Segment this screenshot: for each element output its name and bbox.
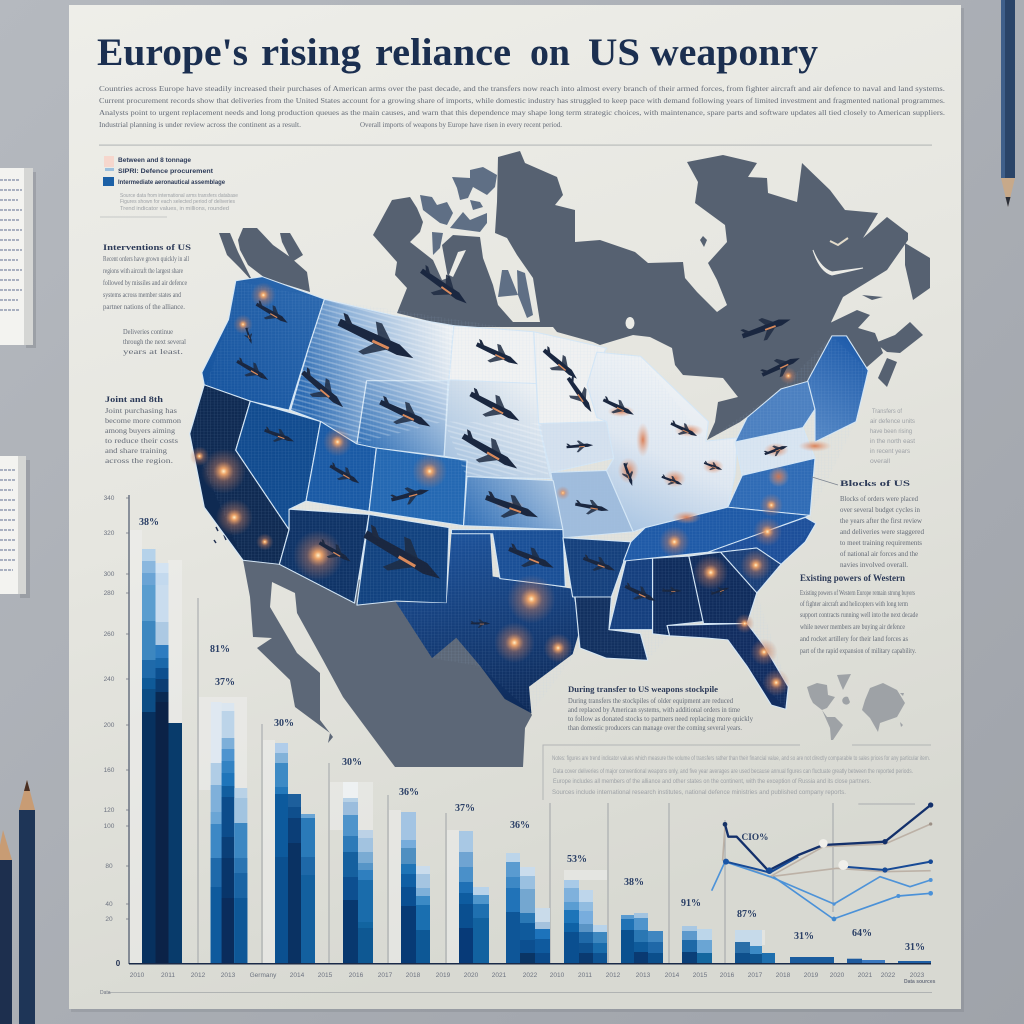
line chart reference line bbox=[858, 803, 915, 805]
pencil, bottom left bbox=[19, 780, 35, 1024]
x axis labels: 2012 bbox=[606, 972, 621, 979]
value labels: 31% bbox=[905, 942, 925, 953]
Kansas bbox=[464, 477, 563, 530]
bar group 4 bbox=[343, 782, 373, 964]
x axis labels: Germany bbox=[250, 972, 277, 979]
text block: interventions: Interventions of US bbox=[103, 243, 192, 252]
text block: existing powers: of fighter aircraft and helicopters with long term bbox=[800, 599, 908, 608]
y axis labels: 0 bbox=[116, 959, 121, 968]
Iowa bbox=[539, 422, 614, 473]
text block: right upper note: air defence units bbox=[870, 419, 915, 425]
Colorado bbox=[369, 448, 467, 526]
value labels: 36% bbox=[399, 787, 419, 798]
x axis labels: 2016 bbox=[720, 972, 735, 979]
value labels: 87% bbox=[737, 909, 757, 920]
bar group 14 bbox=[898, 961, 931, 964]
Oklahoma bbox=[451, 530, 565, 587]
Tennessee and Kentucky bbox=[624, 507, 810, 561]
map grid texture bbox=[190, 281, 868, 713]
notes box: Data cover deliveries of major conventional weapons only, and five year averages are used because annual figures can fluctuate greatly between the reported periods. bbox=[553, 769, 913, 775]
bar group 6 bbox=[459, 831, 489, 964]
value labels: 36% bbox=[510, 820, 530, 831]
Great Lakes states bbox=[587, 352, 737, 532]
Washington and Oregon bbox=[202, 277, 324, 410]
bar group 3 bbox=[275, 743, 315, 964]
tan series bbox=[723, 824, 931, 877]
bar group 7 bbox=[506, 853, 550, 964]
x axis labels: 2014 bbox=[290, 972, 305, 979]
New England bbox=[808, 336, 868, 442]
x axis labels: 2020 bbox=[464, 972, 479, 979]
text block: existing powers: and rocket artillery for their land forces as bbox=[800, 634, 908, 643]
text block: existing powers: Existing powers of Western Europe remain strong buyers bbox=[800, 588, 915, 597]
legend note: Figures shown for each selected period of deliveries bbox=[120, 199, 235, 205]
text block: interventions: through the next several bbox=[123, 337, 186, 346]
x axis labels: 2012 bbox=[191, 972, 206, 979]
text block: interventions bbox=[103, 243, 192, 356]
Newfoundland bbox=[905, 243, 930, 300]
x axis labels: 2020 bbox=[830, 972, 845, 979]
text block: existing powers: Existing powers of Western bbox=[800, 573, 905, 583]
chart backing columns bbox=[130, 530, 765, 964]
text block: joint: and share training bbox=[105, 446, 167, 455]
bar group 2 bbox=[211, 702, 247, 964]
text block: during transfer: During transfers the stockpiles of older equipment are reduced bbox=[568, 696, 733, 705]
bar group 9 bbox=[621, 913, 663, 964]
South America bbox=[822, 710, 843, 740]
North Carolina bbox=[708, 517, 816, 564]
value labels: 38% bbox=[624, 877, 644, 888]
Nevada bbox=[236, 401, 321, 530]
footer rule bbox=[108, 992, 932, 993]
x axis labels: 2022 bbox=[523, 972, 538, 979]
North Dakota bbox=[449, 326, 536, 384]
y axis labels: 100 bbox=[104, 823, 115, 830]
text block: blocks of US: Blocks of orders were placed bbox=[840, 494, 918, 503]
bar group 5 bbox=[401, 812, 430, 964]
legend swatch: low share bbox=[104, 156, 114, 167]
x axis labels: 2018 bbox=[406, 972, 421, 979]
x axis labels: 2014 bbox=[665, 972, 680, 979]
text block: during transfer: and replaced by American systems, with additional orders in time bbox=[568, 705, 741, 714]
intro text block: Industrial planning is under review across the continent as a result. bbox=[99, 120, 301, 129]
footer source: Data bbox=[100, 990, 111, 996]
Mexico landmass bbox=[243, 550, 532, 767]
footer credit: Data sources bbox=[904, 979, 936, 985]
title: reliance bbox=[375, 31, 511, 74]
bar group 8 bbox=[564, 880, 607, 964]
notes box: Sources include international research institutes, national defence ministries and published company reports. bbox=[552, 790, 846, 796]
South Dakota and Nebraska bbox=[444, 380, 551, 479]
Pennsylvania and Ohio bbox=[735, 428, 815, 475]
text block: right upper note bbox=[870, 409, 915, 465]
y axis labels: 20 bbox=[105, 916, 113, 923]
bar group 1 bbox=[142, 549, 182, 964]
small Pacific islands bbox=[214, 527, 236, 543]
x axis labels: 2017 bbox=[748, 972, 763, 979]
text block: interventions: systems across member states and bbox=[103, 290, 181, 299]
y axis labels: 200 bbox=[104, 722, 115, 729]
Prince Edward and Cape Breton bbox=[878, 358, 897, 387]
Arctic islands bbox=[420, 167, 533, 318]
blue series bbox=[726, 857, 931, 873]
legend swatch: high share bbox=[103, 177, 114, 186]
y axis labels: 260 bbox=[104, 631, 115, 638]
intro text block: Analysts point to urgent replacement needs and long production queues as the main causes, and warn that this dependence may shape long term strategic choices, with maintenance, spare parts and software updates all tied closely to American suppliers. bbox=[99, 108, 945, 117]
notes box bbox=[543, 745, 931, 800]
notes box: Europe includes all members of the alliance and other states on the continent, with the exception of Russia and its close partners. bbox=[553, 779, 871, 785]
scaled map layers bbox=[190, 261, 868, 713]
Nova Scotia bbox=[875, 322, 923, 353]
small islands bbox=[842, 693, 904, 727]
city glow markers bbox=[190, 282, 797, 696]
South Carolina bbox=[720, 548, 781, 593]
Alaska west lobe bbox=[219, 233, 253, 282]
Canada lakes and inlets bbox=[449, 236, 863, 329]
map of North America bbox=[190, 151, 930, 767]
text block: joint: Joint and 8th bbox=[105, 395, 164, 404]
title: US bbox=[588, 31, 640, 74]
y axis labels: 240 bbox=[104, 676, 115, 683]
title: on bbox=[530, 31, 570, 74]
index card, lower left bbox=[0, 456, 30, 598]
x axis labels: 2015 bbox=[318, 972, 333, 979]
line chart bbox=[712, 802, 933, 921]
line chart label: CIO% bbox=[742, 833, 768, 843]
x axis labels: 2016 bbox=[349, 972, 364, 979]
text block: blocks of US bbox=[840, 479, 924, 569]
North America bbox=[807, 683, 835, 710]
x axis labels: 2019 bbox=[436, 972, 451, 979]
x axis baseline bbox=[129, 963, 931, 964]
y axis labels: 340 bbox=[104, 495, 115, 502]
value labels: 31% bbox=[794, 931, 814, 942]
index card, upper left bbox=[0, 168, 36, 348]
New Mexico bbox=[357, 515, 449, 605]
text block: during transfer: than domestic producers can manage over the coming several years. bbox=[568, 723, 742, 732]
value labels: 37% bbox=[455, 803, 475, 814]
title: rising bbox=[261, 31, 362, 74]
Wyoming bbox=[357, 381, 448, 456]
x axis labels: 2018 bbox=[776, 972, 791, 979]
x axis labels: 2011 bbox=[161, 972, 175, 979]
x axis labels: 2021 bbox=[492, 972, 507, 979]
y axis labels: 80 bbox=[105, 863, 113, 870]
New York bbox=[735, 381, 815, 442]
Texas bbox=[396, 534, 580, 713]
header rule bbox=[99, 144, 932, 146]
x axis labels: 2022 bbox=[881, 972, 896, 979]
intro text block: Countries across Europe have steadily increased their purchases of American arms over the past decade, and the transfers now reach into almost every branch of their armed forces, from fighter aircraft and air defence to naval and land systems. bbox=[99, 84, 945, 93]
value labels: 91% bbox=[681, 898, 701, 909]
bar group 11 bbox=[735, 930, 775, 964]
divider lines bbox=[198, 598, 833, 963]
text block: existing powers: while newer members are buying air defence bbox=[800, 622, 906, 631]
aircraft icons bbox=[233, 261, 804, 628]
y axis labels bbox=[104, 495, 121, 968]
text block: interventions: years at least. bbox=[123, 347, 183, 356]
Louisiana bbox=[575, 597, 648, 660]
United States states bbox=[190, 277, 868, 713]
text block: blocks of US: over several budget cycles in bbox=[840, 505, 920, 514]
text block: during transfer bbox=[568, 684, 753, 732]
x axis labels: 2011 bbox=[578, 972, 592, 979]
text block: right upper note: Transfers of bbox=[872, 409, 902, 415]
title: Europe's bbox=[97, 31, 248, 74]
bar chart bbox=[104, 495, 931, 979]
text block: existing powers: support contracts running well into the next decade bbox=[800, 610, 919, 619]
text block: blocks of US: navies involved overall. bbox=[840, 560, 908, 569]
x axis labels: 2023 bbox=[910, 972, 925, 979]
data points bbox=[723, 802, 933, 921]
y axis labels: 160 bbox=[104, 767, 115, 774]
Greenland bbox=[837, 674, 851, 690]
text block: joint: become more common bbox=[105, 416, 181, 425]
text block: during transfer: to follow as donated stocks to partners need replacing more quickly bbox=[568, 714, 753, 723]
y axis bbox=[126, 495, 129, 964]
text block: existing powers bbox=[800, 573, 919, 655]
legend labels: Between and 8 tonnage bbox=[118, 157, 191, 164]
Alaska east lobe bbox=[238, 228, 310, 292]
text block: interventions: partner nations of the alliance. bbox=[103, 302, 185, 311]
value labels bbox=[139, 517, 925, 953]
value labels: 81% bbox=[210, 644, 230, 655]
x axis labels: 2015 bbox=[693, 972, 708, 979]
Mississippi bbox=[609, 558, 653, 630]
text block: blocks of US: the years after the first review bbox=[840, 516, 923, 525]
Alabama bbox=[653, 556, 703, 636]
Eurasia and Africa bbox=[862, 683, 905, 732]
gulf island bbox=[862, 295, 883, 300]
text block: blocks of US: of national air forces and the bbox=[840, 549, 919, 558]
y axis labels: 320 bbox=[104, 530, 115, 537]
y axis labels: 120 bbox=[104, 807, 115, 814]
conflict blots, Great Lakes bbox=[495, 406, 831, 524]
value labels: 64% bbox=[852, 928, 872, 939]
text block: joint: to reduce their costs bbox=[105, 436, 178, 445]
Montana stripe texture bbox=[291, 299, 548, 477]
x axis labels: 2010 bbox=[130, 972, 145, 979]
mid blue series bbox=[773, 877, 931, 919]
text block: blocks of US: Blocks of US bbox=[840, 479, 911, 488]
text block: right upper note: in recent years bbox=[870, 449, 910, 455]
value labels: 53% bbox=[567, 854, 587, 865]
Canada and Alaska landmass bbox=[219, 151, 930, 440]
x axis labels: 2019 bbox=[804, 972, 819, 979]
bar group 10 bbox=[682, 926, 712, 964]
x axis labels: 2010 bbox=[550, 972, 565, 979]
legend note: Trend indicator values, in millions, rounded bbox=[120, 206, 229, 212]
legend note: Source data from international arms transfers database bbox=[120, 193, 238, 199]
Arizona bbox=[279, 509, 369, 603]
legend labels: SIPRI: Defence procurement bbox=[118, 168, 214, 175]
intro text block: Current procurement records show that deliveries from the United States account for a growing share of imports, while domestic industry has struggled to keep pace with demand following years of limited investment and fragmented national programmes. bbox=[99, 96, 945, 105]
intro text block: Overall imports of weapons by Europe have risen in every recent period. bbox=[360, 120, 562, 129]
Canada mainland bbox=[373, 151, 908, 440]
Minnesota bbox=[534, 332, 607, 424]
text block: during transfer: During transfer to US weapons stockpile bbox=[568, 684, 718, 694]
bar group 13 bbox=[847, 959, 885, 964]
text block: interventions: Deliveries continue bbox=[123, 327, 174, 336]
title: weaponry bbox=[650, 31, 819, 74]
pencil, top right bbox=[1001, 0, 1015, 207]
Alaska panhandle islands bbox=[280, 233, 303, 262]
text block: joint: across the region. bbox=[105, 456, 173, 465]
intro text block bbox=[99, 84, 945, 129]
light blue series bbox=[712, 862, 931, 904]
text block: right upper note: overall bbox=[870, 459, 890, 465]
inset world map bbox=[807, 674, 905, 740]
text block: blocks of US: and deliveries were staggered bbox=[840, 527, 924, 536]
text block: interventions: regions with aircraft the largest share bbox=[103, 266, 183, 275]
text block: right upper note: have been rising bbox=[870, 429, 912, 435]
y axis labels: 300 bbox=[104, 571, 115, 578]
pencil, bottom far left bbox=[0, 830, 12, 1024]
text block: interventions: Recent orders have grown quickly in all bbox=[103, 254, 189, 263]
bar group 12 bbox=[790, 957, 834, 964]
x axis labels bbox=[130, 972, 925, 979]
value labels: 30% bbox=[274, 718, 294, 729]
navy series bbox=[725, 805, 931, 871]
legend swatch: medium share bbox=[105, 168, 114, 171]
Montana and Idaho bbox=[291, 299, 454, 444]
Missouri bbox=[551, 470, 633, 538]
x axis labels: 2021 bbox=[858, 972, 873, 979]
callout leader line bbox=[812, 477, 838, 485]
Utah bbox=[306, 422, 376, 511]
Florida bbox=[667, 623, 788, 709]
text block: right upper note: in the north east bbox=[870, 439, 915, 445]
value labels: 30% bbox=[342, 757, 362, 768]
value labels: 38% bbox=[139, 517, 159, 528]
value labels: 37% bbox=[215, 677, 235, 688]
x axis labels: 2017 bbox=[378, 972, 393, 979]
y axis labels: 40 bbox=[105, 901, 113, 908]
Virginia bbox=[728, 458, 815, 515]
x axis labels: 2013 bbox=[636, 972, 651, 979]
y axis labels: 280 bbox=[104, 590, 115, 597]
Arkansas bbox=[563, 538, 631, 597]
Georgia bbox=[689, 552, 757, 623]
legend labels bbox=[118, 157, 225, 186]
text block: blocks of US: to meet training requirements bbox=[840, 538, 922, 547]
text block: joint: among buyers aiming bbox=[105, 426, 175, 435]
text block: existing powers: part of the rapid expansion of military capability. bbox=[800, 646, 916, 655]
legend note bbox=[120, 193, 238, 212]
title bbox=[97, 31, 819, 74]
legend labels: Intermediate aeronautical assemblage bbox=[118, 179, 225, 186]
x axis labels: 2013 bbox=[221, 972, 236, 979]
text block: joint: Joint purchasing has bbox=[105, 406, 177, 415]
legend bbox=[100, 156, 238, 218]
text block: interventions: followed by missiles and air defence bbox=[103, 278, 188, 287]
California bbox=[190, 385, 289, 564]
text block: joint bbox=[105, 395, 181, 465]
